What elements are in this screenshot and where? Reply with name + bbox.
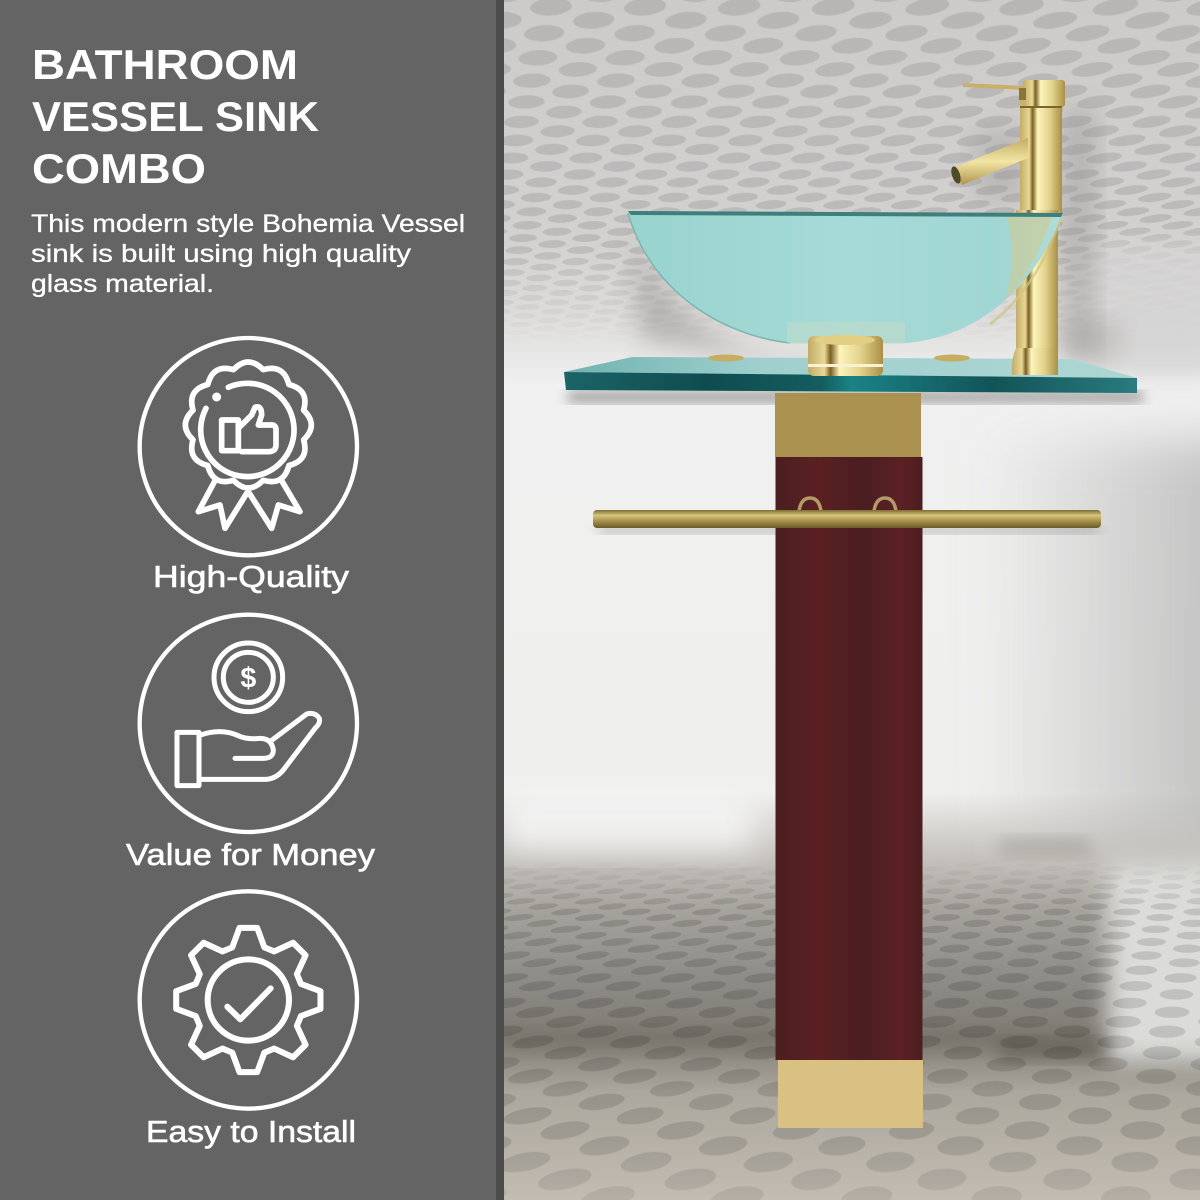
glass vessel bowl (628, 211, 1063, 344)
title (32, 41, 319, 192)
product: vessel sink, faucet, glass shelf and pedestal (562, 80, 1200, 1128)
icon: hand holding coin: $ (240, 662, 256, 694)
icon: high-quality badge (140, 338, 357, 555)
pedestal wood column (776, 457, 922, 1060)
pedestal gold collar (775, 393, 921, 457)
description text: This modern style Bohemia Vessel (31, 210, 465, 238)
product photo background (504, 0, 1200, 1200)
faucet (949, 80, 1065, 375)
label: value for money: Value for Money (126, 837, 376, 872)
label: high-quality: High-Quality (153, 559, 350, 594)
towel bar hooks (799, 498, 896, 511)
pedestal gold base (778, 1060, 923, 1128)
description text (31, 210, 465, 298)
floor dots (504, 876, 1200, 1200)
panel: left feature sidebar (31, 0, 504, 1200)
title: VESSEL SINK (32, 93, 319, 140)
label: easy to install: Easy to Install (146, 1114, 356, 1149)
cast shadows (568, 110, 1200, 533)
description text: glass material. (31, 270, 214, 298)
description text: sink is built using high quality (31, 240, 412, 268)
title: COMBO (32, 145, 206, 192)
drain (808, 335, 883, 376)
glass shelf (564, 354, 1137, 393)
icon: gear with check mark (140, 891, 357, 1109)
icon: hand holding coin (140, 615, 357, 832)
title: BATHROOM (32, 41, 298, 88)
wall dots (504, 0, 1200, 310)
towel bar (593, 510, 1101, 528)
